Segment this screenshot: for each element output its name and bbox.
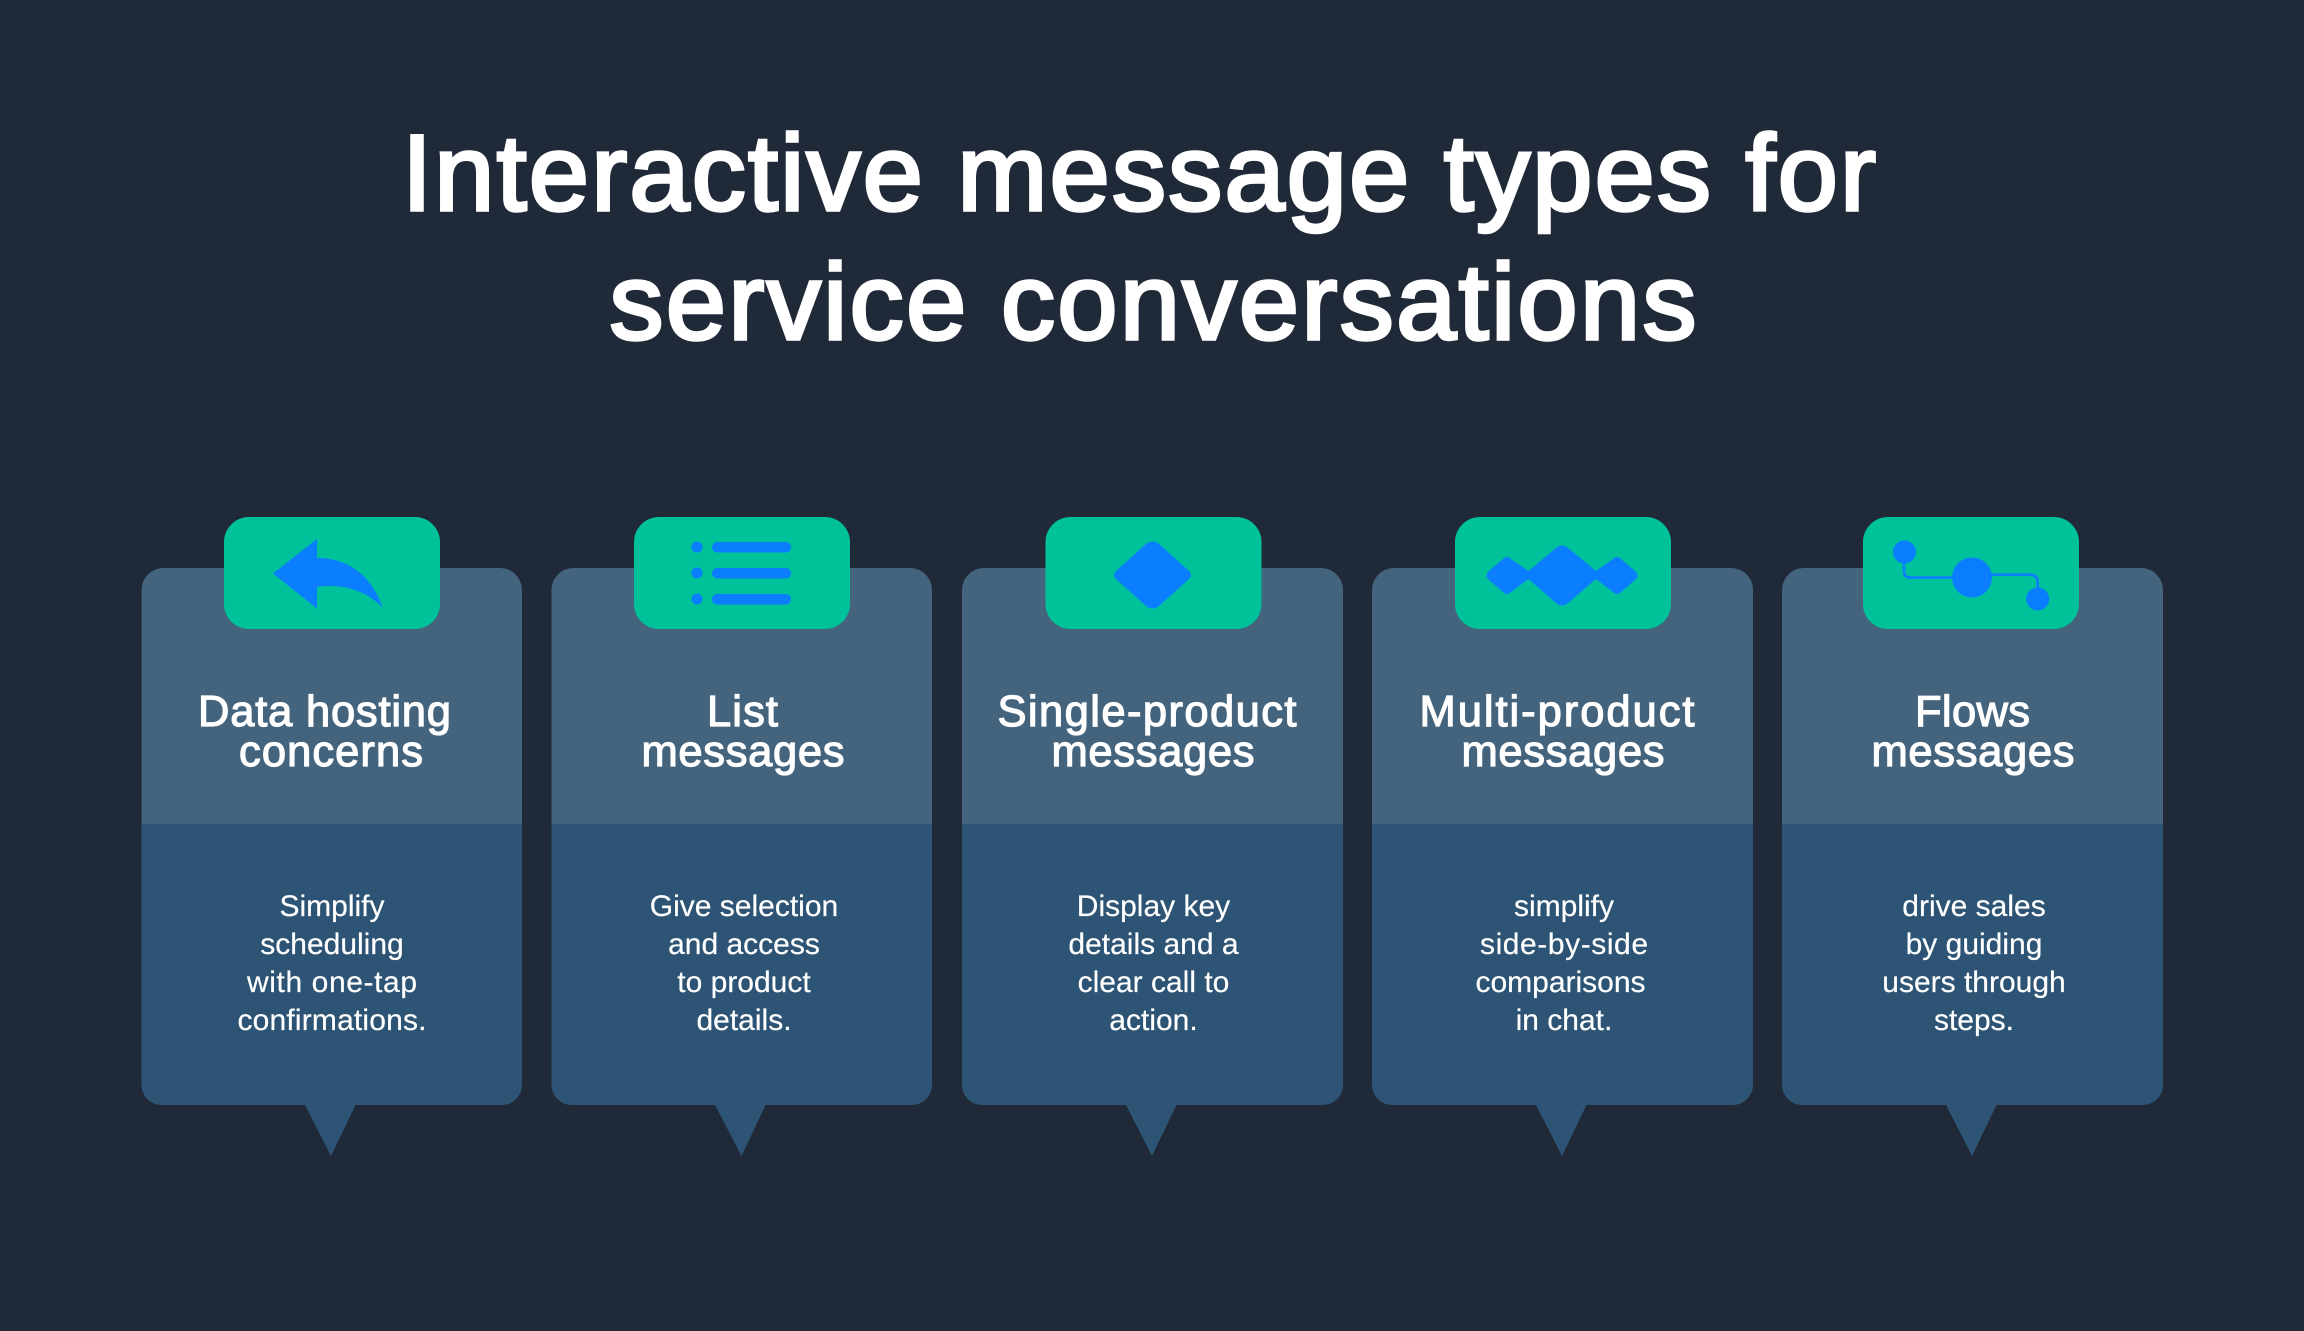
heading [998,688,1296,776]
heading: Multi-product [1420,688,1694,736]
text block [1475,890,1648,1037]
text block: simplify [1514,890,1614,923]
text block: confirmations. [238,1004,426,1037]
heading: messages [1872,728,2074,776]
icon: reply arrow [224,517,440,629]
text block: in chat. [1516,1004,1612,1037]
heading [1872,688,2074,776]
title: Interactive message types for [402,112,1876,233]
text block: users through [1882,966,2066,999]
icon: flow nodes [1863,517,2079,629]
heading: messages [642,728,844,776]
heading: Flows [1915,688,2030,736]
heading: Single-product [998,688,1296,736]
heading: List [707,688,778,736]
text block: steps. [1934,1004,2014,1037]
icon: list [634,517,850,629]
panel: list messages [552,517,932,1156]
text block [650,890,838,1037]
text block: comparisons [1475,966,1646,999]
heading: concerns [239,728,423,776]
text block: Simplify [279,890,385,923]
text block: with one-tap [246,966,417,999]
text block: clear call to [1078,966,1229,999]
text block: Give selection [650,890,838,923]
panel: data hosting concerns [142,517,522,1156]
heading: Data hosting [198,688,451,736]
text block: action. [1109,1004,1198,1037]
icon: diamond [1046,517,1262,629]
panel: multi-product messages [1372,517,1753,1156]
text block [1882,890,2066,1037]
text block: and access [668,928,820,961]
text block: Display key [1077,890,1230,923]
text block: side-by-side [1480,928,1648,961]
text block [1068,890,1239,1037]
icon: three diamonds [1455,517,1671,629]
title [402,112,1876,362]
panel: flows messages [1782,517,2163,1156]
text block: details and a [1068,928,1239,961]
heading [1420,688,1694,776]
heading [198,688,451,776]
text block: to product [677,966,811,999]
heading: messages [1462,728,1664,776]
heading: messages [1052,728,1254,776]
text block [238,890,426,1037]
panel: single-product messages [962,517,1343,1156]
text block: details. [696,1004,792,1037]
heading [642,688,844,776]
text block: drive sales [1902,890,2046,923]
text block: by guiding [1906,928,2042,961]
text block: scheduling [260,928,404,961]
title: service conversations [610,241,1696,362]
